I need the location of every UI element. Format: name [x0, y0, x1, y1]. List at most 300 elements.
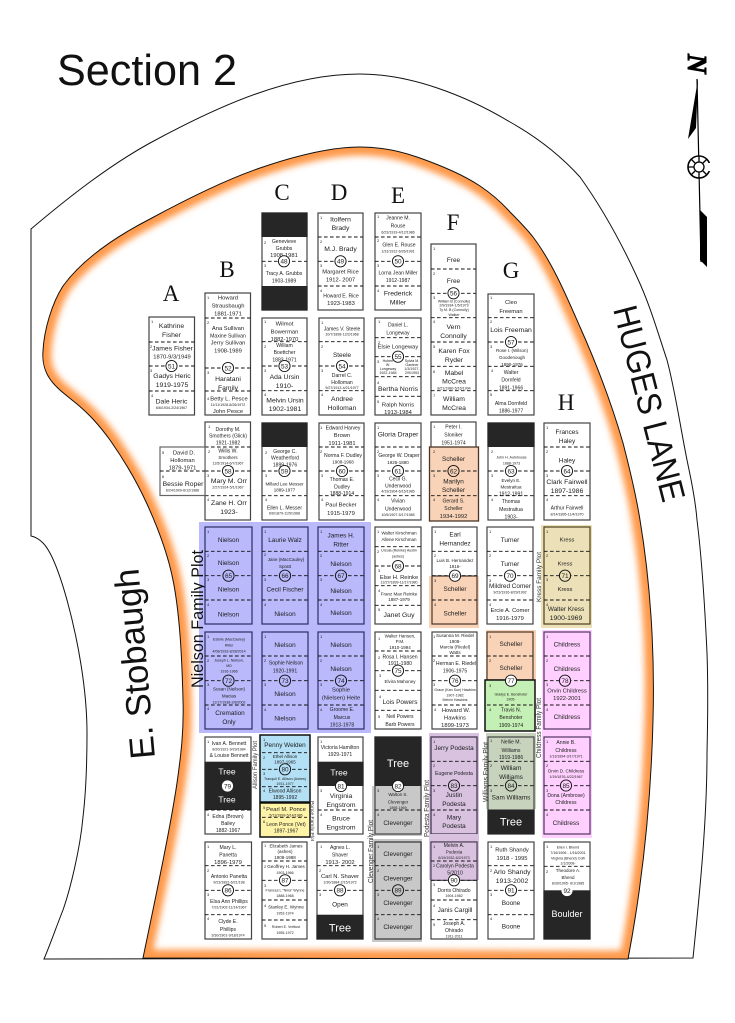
plot 86: Clyde E.: [218, 919, 238, 925]
plot 82: 4: [377, 812, 380, 817]
plot 49: 3: [320, 263, 323, 268]
plot 90: Ohirado: [445, 928, 463, 934]
plot 74: [318, 632, 364, 729]
plot 89: Clevenger: [383, 924, 413, 931]
plot 72: Macias: [222, 694, 237, 698]
plot 59: 1889-1977: [274, 488, 296, 493]
plot 49: 4: [320, 288, 323, 293]
plot 68: 3: [378, 568, 381, 573]
plot 88: [316, 842, 364, 940]
plot 49: Howard E. Rice: [323, 294, 359, 300]
plot 55: 4: [377, 380, 380, 385]
plot 55: Longeway: [386, 330, 410, 336]
plot 87: (ashes): [277, 849, 293, 854]
plot 78: Childress: [554, 666, 580, 673]
plot 60: 1908-1968: [332, 460, 354, 465]
plot 64: Clark Fairwell: [546, 479, 588, 486]
plot 82: Tree: [387, 758, 409, 770]
section letter A: A: [163, 281, 180, 306]
plot 64: 1897-1986: [551, 488, 583, 495]
plot 76: Melvin Hawkins: [443, 698, 468, 702]
plot 68: (ashes): [392, 554, 404, 558]
plot 91: Ruth Shandy: [495, 848, 529, 854]
plot 48: Grubbs: [276, 246, 293, 252]
plot 58: Zane H. Orr: [211, 500, 248, 507]
plot 90: 4: [433, 903, 436, 908]
plot 48: 1903-1989: [272, 278, 296, 284]
plot 65: Nielson: [218, 587, 240, 594]
plot 51: 6/6/1934-2/24/1967: [156, 406, 187, 410]
plot 86: 1: [207, 844, 210, 849]
plot 63: 4: [491, 497, 494, 502]
plot 84: Williams: [499, 774, 523, 781]
plot 87: 2: [264, 864, 267, 869]
plot 56: 4: [433, 319, 436, 324]
plot 81: Virginia: [330, 793, 352, 800]
plot 56: Vern: [447, 324, 461, 331]
plot 50: 6/23/1919-4/12/1986: [381, 230, 415, 234]
plot 53: 1: [264, 319, 267, 324]
plot 81: 1: [320, 739, 323, 744]
plot 70: 1916-1979: [496, 616, 524, 622]
plot 61: Vivian: [391, 498, 405, 504]
plot 56: 2: [433, 271, 436, 276]
section letter G: G: [503, 258, 519, 283]
plot 57: 3: [490, 344, 493, 349]
grave number 63: 63: [507, 468, 515, 475]
plot 75: 1910-1994: [389, 645, 411, 650]
plot 73: Nielson: [274, 691, 296, 698]
plot 87: Elizabeth James: [269, 843, 303, 848]
grave number 69: 69: [451, 573, 459, 580]
plot 69: Hernandez: [439, 541, 471, 548]
plot 77: Scheller: [499, 641, 523, 648]
plot 52: 3: [207, 370, 210, 375]
plot 65: 3: [207, 577, 210, 582]
plot 64: 8/14/1895-11/4/1970: [551, 512, 583, 516]
plot 92: Virginia (Bhend) Cofli: [551, 856, 585, 860]
plot 78: Childress: [554, 714, 580, 721]
plot 69: 4: [434, 602, 437, 607]
plot 75: 1911-1980: [388, 661, 412, 667]
plot 76: 1: [433, 634, 436, 639]
plot 62: 1: [433, 424, 436, 429]
plot 71: Kress: [560, 538, 575, 544]
plot 76: 3: [433, 682, 436, 687]
plot 88: Carl N. Shaver: [321, 874, 359, 880]
plot 92: 1/1/2008-: [560, 862, 576, 866]
plot 86: Phillips: [220, 927, 237, 933]
plot 57: [488, 294, 534, 415]
plot 75: P.M.: [396, 639, 404, 644]
plot 86: 4: [207, 916, 210, 921]
plot 86: 2: [207, 868, 210, 873]
panel: Kress family plot background: [541, 525, 592, 628]
plot 53: 3: [264, 368, 267, 373]
plot 57: Dornfeld: [501, 378, 521, 384]
grave number 59: 59: [281, 468, 288, 475]
road label: Huges Lane: HUGES LANE: [605, 302, 692, 506]
plot 54: James V. Steele: [324, 326, 360, 332]
plot 86: Mary L.: [220, 845, 236, 851]
plot 86: Antonio Panetta: [211, 874, 247, 880]
plot 76: Hawkins: [444, 716, 466, 722]
plot 56: McCrea: [442, 378, 466, 386]
plot 61: Gloria Draper: [378, 432, 419, 438]
plot 54: Steele: [333, 352, 352, 359]
plot 58: 1921-1982: [216, 440, 240, 446]
plot 76: Susanna M. Riedel: [436, 633, 474, 638]
plot 88: 1: [320, 844, 323, 849]
plot 58: [205, 422, 250, 520]
plot 73: Nielson: [274, 642, 296, 649]
plot 72: 4: [207, 706, 210, 711]
plot 61: 1: [377, 425, 380, 430]
label: Podesta Family Plot: Podesta Family Plot: [424, 780, 431, 837]
plot 85: 1/19/1876-4/22/1967: [549, 775, 583, 779]
panel: Nielson family plot background: [199, 522, 371, 733]
plot 71: 4: [546, 602, 549, 607]
plot 58: 3: [207, 473, 210, 478]
plot 70: Mildred Comer: [489, 583, 532, 590]
plot 72: Ritter: [225, 644, 234, 648]
plot 79: 1882-1967: [216, 828, 240, 834]
plot 58: Mary M. Orr: [211, 478, 248, 485]
plot 88: Tree: [329, 922, 351, 934]
plot 72: 4/08/1933-8/28/2014: [212, 649, 246, 653]
plot 56: Walker: [448, 313, 460, 317]
plot 63: Thomas: [502, 499, 521, 505]
plot 49: Margaret Rice: [322, 270, 359, 276]
plot 56: 5: [433, 344, 436, 349]
plot 63: 1912-1991: [499, 492, 523, 498]
plot 63: Evelyn E.: [501, 478, 521, 483]
plot 73: 3: [264, 682, 267, 687]
plot 53: 2: [264, 344, 267, 349]
grave number 74: 74: [337, 678, 345, 685]
plot 53: 1882-1970: [271, 337, 298, 343]
plot 73: 1: [264, 634, 267, 639]
plot 88: 1/30/1884-2/15/1972: [323, 880, 357, 884]
plot 74: Marcus: [334, 715, 351, 721]
plot 83: Justin: [446, 792, 463, 799]
plot 64: 2: [546, 449, 549, 454]
plot 90: Podesta: [446, 850, 463, 855]
plot 72: [205, 632, 252, 729]
plot 60: Thomas E.: [330, 477, 354, 483]
icon: north compass needle: N: [682, 53, 712, 75]
label: Clevenger Family Plot: Clevenger Family Plot: [366, 819, 375, 883]
plot 66: Jane (MacCauley): [268, 557, 305, 562]
plot 62: Gerard S.: [442, 498, 465, 504]
plot 57: 1886-1977: [499, 408, 523, 414]
plot 78: 2: [546, 658, 549, 663]
plot 70: [487, 527, 533, 624]
plot 67: 4: [320, 602, 323, 607]
grave number 73: 73: [281, 678, 289, 685]
plot 79: & Louise Bennett: [210, 753, 249, 759]
plot 75: 3: [379, 673, 382, 678]
plot 77: 1: [489, 634, 492, 639]
plot 61: 3: [377, 473, 380, 478]
grave number 68: 68: [394, 563, 402, 570]
plot 53: Boettcher: [274, 350, 296, 356]
plot 84: 1: [490, 738, 493, 743]
plot 56: Free: [447, 278, 461, 285]
plot 59: [261, 422, 308, 520]
grave number 90: 90: [450, 878, 458, 885]
plot 86: 9/23/1891-6/21/198: [213, 880, 245, 884]
grave number 64: 64: [563, 468, 571, 475]
plot 58 extension: 6: [162, 474, 165, 479]
plot 54: Darrel C.: [332, 373, 352, 379]
plot 89: Clevenger: [383, 851, 413, 858]
plot 78: 4: [546, 707, 549, 712]
plot 67: Nielson: [330, 561, 352, 568]
plot 80: Tranquil E. Allison (Ashes): [264, 777, 306, 781]
plot 49: Brady: [332, 225, 350, 232]
plot 85: Dona (Ambrose): [547, 793, 585, 799]
plot 77: 4: [489, 707, 492, 712]
plot 50: Rouse: [391, 224, 406, 230]
plot 86: Panetta: [219, 852, 237, 858]
plot 86: [205, 842, 252, 939]
plot 78: 1: [546, 634, 549, 639]
plot 60: 2: [320, 449, 323, 454]
plot 59: 2: [265, 450, 268, 455]
plot 55: Sylvia M.: [405, 359, 419, 363]
plot 87: Robert E. Vretlust: [272, 925, 300, 929]
plot 90: [431, 842, 477, 939]
plot 68: Franz Max Reinke: [381, 591, 418, 596]
plot 64: 3: [546, 473, 549, 478]
plot 67: Nielson: [330, 610, 352, 617]
plot 87: Frances L "Nina" Wynne: [266, 889, 304, 893]
plot 66: Nielson: [274, 611, 296, 618]
plot 87: 1888-1968: [276, 894, 294, 898]
plot 51: Kathrine: [159, 323, 184, 330]
plot 62: Marilyn: [443, 478, 464, 486]
plot 56: 1: [433, 246, 436, 251]
plot 87: 4: [264, 903, 267, 908]
plot 58 extension: Bessie Roper: [163, 481, 204, 488]
panel: Clevenger family plot background, upper: [372, 786, 422, 836]
plot 69: 2: [434, 553, 437, 558]
plot 91: Arlo Shandy: [493, 869, 531, 876]
plot 58: 1923-: [220, 509, 238, 516]
road label: E. Stobaugh: E. Stobaugh: [107, 567, 163, 761]
plot 53: 1902-1981: [269, 406, 301, 413]
plot 66: 2: [264, 552, 267, 557]
plot 87: 3: [264, 883, 267, 888]
plot 49: 1923-1983: [327, 301, 355, 307]
plot 81: [317, 737, 364, 834]
plot 56: Free: [447, 257, 461, 264]
plot 72: Only: [222, 719, 236, 726]
plot 81: Engstrom: [326, 824, 356, 832]
grave number 54: 54: [338, 363, 346, 370]
plot 70: 3: [489, 578, 492, 583]
title: Section 2: [57, 46, 237, 95]
plot 86: 3: [207, 892, 210, 897]
plot 57: 1891-1966: [499, 386, 523, 392]
plot 55: 1913-1984: [384, 410, 413, 416]
plot 53: Ada Ursin: [270, 374, 300, 381]
plot 87: [262, 842, 307, 939]
plot 57: 4: [491, 368, 494, 373]
plot 52: Betty L. Pesce: [210, 396, 248, 402]
plot 75: Lois Powers: [383, 699, 417, 706]
plot 69: Scheller: [443, 611, 467, 618]
plot 58 extension: 5: [162, 450, 165, 455]
plot 67: [318, 527, 364, 624]
plot 90: Melvin A.: [444, 843, 464, 849]
plot 52: Howard: [218, 296, 238, 302]
plot 60: 1: [320, 425, 323, 430]
plot 91: Boone: [502, 924, 521, 930]
plot 90: 5/2010: [447, 870, 463, 876]
plot 75: 2: [378, 655, 381, 660]
plot 85: Orvin D. Childress: [548, 769, 585, 774]
plot 72: Joseph L. Neilson,: [214, 659, 244, 663]
plot 55: [375, 318, 421, 416]
plot 52: Maxine Sullivan: [210, 333, 246, 339]
plot 80: [260, 735, 310, 837]
plot 77: 1905-: [506, 698, 516, 702]
plot 88: Agnes L.: [330, 845, 350, 851]
plot 77: Scheller: [499, 665, 523, 672]
plot 48: Tracy A. Grubbs: [266, 271, 303, 277]
plot 55: W.: [386, 363, 390, 367]
plot 60: 4: [321, 497, 324, 502]
plot 74: 1913-1978: [330, 723, 354, 729]
plot 88: 2: [319, 868, 322, 873]
plot 51: 1870-9/3/1949: [153, 354, 191, 360]
grave number 70: 70: [506, 573, 514, 580]
panel: Williams family plot background: [486, 733, 536, 809]
plot 50: Frederick: [384, 290, 413, 298]
plot 70: 1: [489, 529, 492, 534]
plot 56: 8/21/1980-5/16/1994: [437, 386, 471, 390]
plot 57: 2: [490, 319, 493, 324]
plot 56: Karen Fox: [438, 348, 470, 355]
plot 90: Janis Cargill: [438, 907, 472, 914]
grave number 83: 83: [450, 783, 458, 790]
plot 67: Ritter: [333, 542, 349, 548]
plot 68: 12/27/1899-11/17/1980: [381, 580, 417, 584]
plot 51: 1: [151, 319, 154, 324]
plot 55: 1/3/1927-: [404, 367, 420, 371]
plot 55: 1922-1984: [379, 371, 397, 375]
plot 52: Haratani: [215, 376, 241, 383]
plot 86: 3/30/1901-9/18/1974: [211, 933, 245, 937]
plot 71: Kress: [558, 587, 573, 593]
plot 52: John Pesce: [213, 409, 243, 415]
plot 59: 1899-1976: [273, 462, 297, 468]
plot 50: Jeanne M.: [386, 216, 410, 222]
plot 71: [544, 527, 590, 624]
plot 55: 2/9/1953: [405, 371, 419, 375]
grave number 53: 53: [281, 363, 288, 370]
plot 88: 1913- 2002: [325, 860, 355, 866]
plot 51: 4: [151, 393, 154, 398]
plot 61: Cecil G.: [389, 476, 407, 482]
plot 56: Connolly: [440, 333, 467, 340]
plot 59: George C.: [273, 449, 297, 455]
plot 56: Ty M. B (Connolly): [439, 308, 469, 312]
grave number 80: 80: [281, 767, 289, 774]
plot 72: Cremation: [215, 710, 245, 717]
plot 79: 1: [207, 739, 210, 744]
plot 54: 3: [321, 368, 324, 373]
plot 61: 10/5/1907-5/17/1985: [381, 513, 415, 517]
plot 68: Walter Kirschman: [381, 531, 417, 536]
plot 88: Open: [332, 902, 348, 908]
plot 87: 1908-1988: [274, 855, 296, 860]
plot 54: 10/7/1898-12/2/1968: [325, 333, 359, 337]
panel: Childress family plot background: [542, 630, 592, 838]
plot 71: 1: [546, 529, 549, 534]
plot 83: 4: [433, 812, 436, 817]
plot 52: 11/11/1928-8/26/1972: [211, 403, 245, 407]
plot 53: William: [276, 343, 293, 349]
plot 71: Kress: [558, 562, 573, 568]
plot 88: Shaver: [332, 852, 348, 858]
plot 57: Walter: [504, 370, 519, 376]
plot 66: [262, 527, 308, 624]
plot 80: 5: [263, 805, 266, 810]
plot 52: 2: [207, 320, 210, 325]
plot 91: 3: [490, 892, 493, 897]
plot 59: 6/6/1879-11/5/1968: [269, 512, 300, 516]
plot 90: 1: [433, 844, 436, 849]
plot 65: 4: [207, 602, 210, 607]
grave number 78: 78: [561, 678, 569, 685]
label: Allison Family Plot: Allison Family Plot: [252, 741, 259, 789]
plot 74: Sophie: [332, 688, 350, 694]
plot 55: 3: [377, 359, 380, 364]
plot 66: 4: [264, 602, 267, 607]
plot 90: Joseph A.: [443, 921, 465, 927]
plot 86: 7/31/1902-11/14/1967: [212, 905, 246, 909]
plot 64: 4: [546, 497, 549, 502]
plot 78: 1922-2001: [553, 696, 581, 702]
plot 84: William: [501, 765, 521, 772]
grave number 77: 77: [507, 678, 515, 685]
plot 90: 3: [433, 882, 436, 887]
plot 74: Nielson: [330, 642, 352, 649]
plot 71: 2: [546, 553, 549, 558]
plot 90: 2: [433, 863, 436, 868]
plot 82: Clevenger: [383, 820, 413, 827]
plot 81: Tree: [330, 768, 348, 778]
grave number 48: 48: [280, 259, 288, 266]
plot 77: [485, 630, 536, 731]
plot 68: Allene Kirschman: [381, 537, 417, 542]
plot 90: 5: [433, 922, 436, 927]
plot 60: Edward Harvey: [326, 426, 361, 432]
plot 91: 1918 - 1995: [497, 856, 527, 862]
plot 85: Annie B.: [556, 740, 576, 746]
plot 80: 1897-1965: [274, 760, 296, 765]
plot 55: Elsie Longeway: [378, 344, 418, 350]
plot 78: Childress: [554, 642, 580, 648]
plot 55: 2: [378, 340, 381, 345]
plot 52: Ana Sullivan: [212, 326, 244, 332]
plot 92: 2: [546, 869, 549, 874]
plot 56: McCrea: [442, 405, 466, 412]
label: Nielson Family Plot: Nielson Family Plot: [188, 550, 207, 688]
